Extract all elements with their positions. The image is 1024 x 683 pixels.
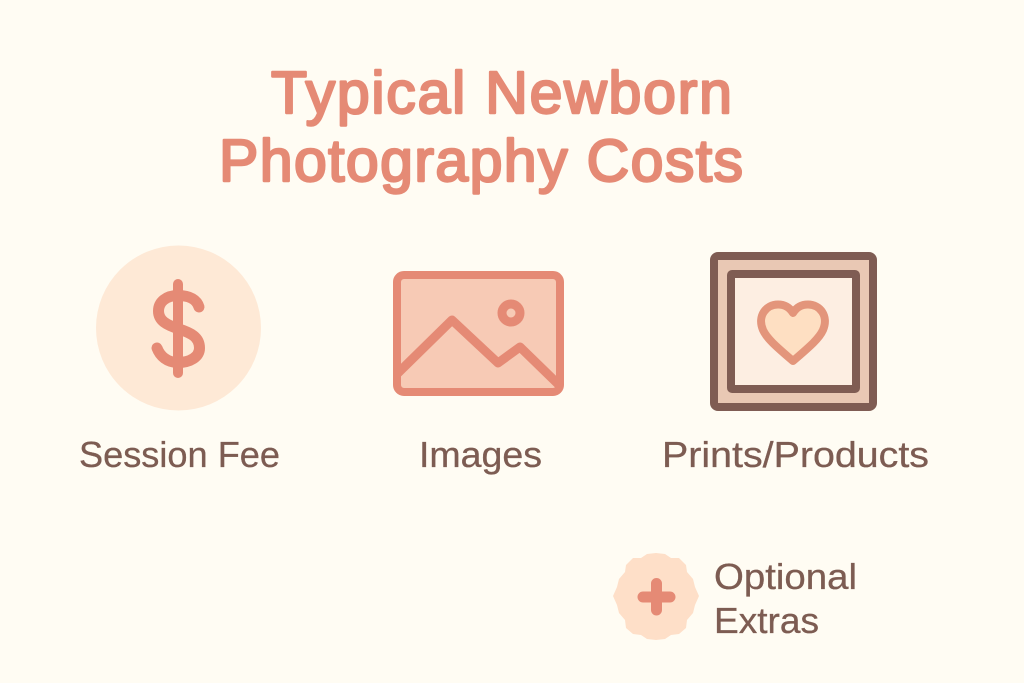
panel: session fee	[79, 246, 280, 475]
icon: plus badge	[613, 553, 699, 640]
title	[219, 60, 743, 194]
panel: optional extras	[613, 553, 857, 641]
title: Photography Costs	[219, 128, 743, 194]
icon: framed heart	[714, 256, 873, 407]
label: optional extras: Extras	[714, 600, 819, 641]
label: prints/products: Prints/Products	[662, 434, 929, 475]
label: optional extras: Optional	[714, 556, 857, 597]
label: images: Images	[419, 434, 542, 475]
label: optional extras	[714, 556, 857, 641]
panel: prints and products	[662, 256, 929, 475]
icon: dollar coin	[96, 246, 261, 410]
panel: images	[397, 275, 560, 475]
icon: picture	[397, 275, 560, 392]
title: Typical Newborn	[271, 60, 732, 126]
label: session fee: Session Fee	[79, 434, 280, 475]
